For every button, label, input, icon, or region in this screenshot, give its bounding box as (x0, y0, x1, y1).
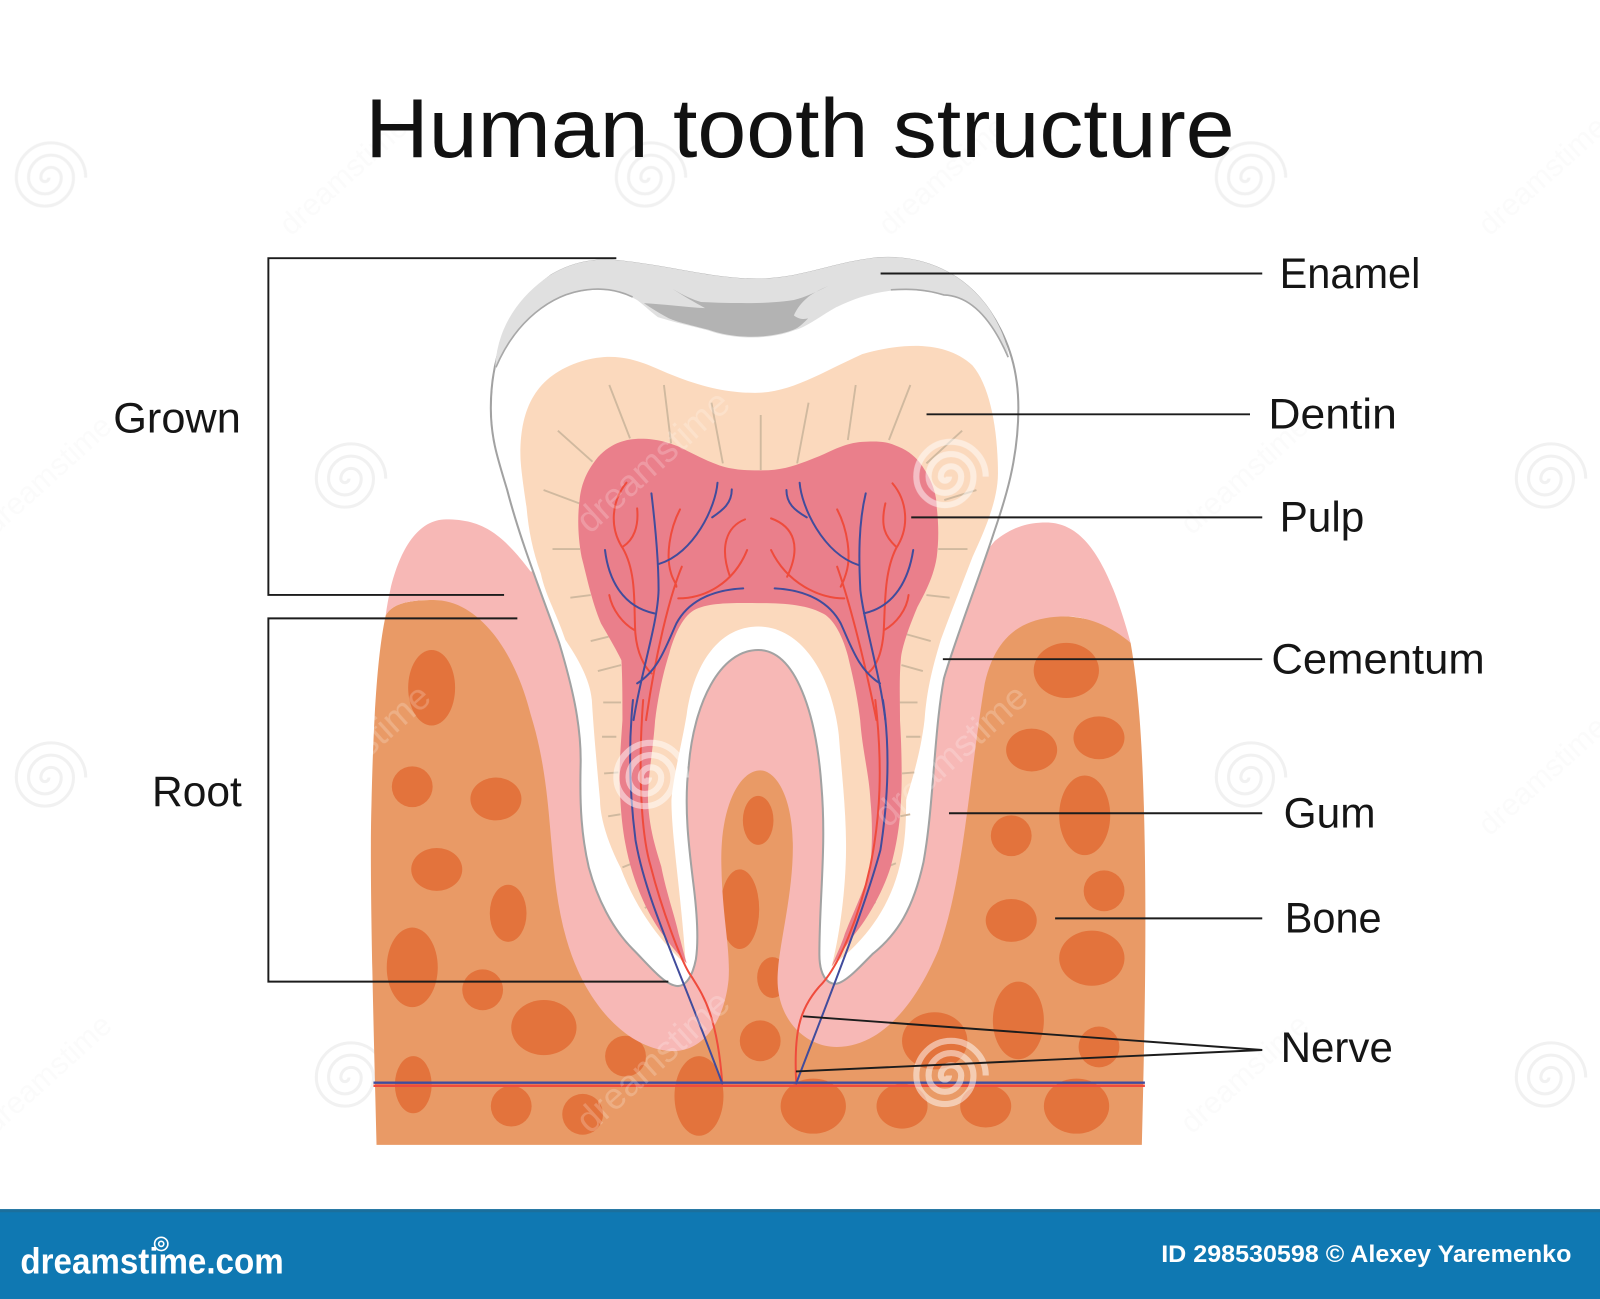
label: Root: Root (152, 768, 242, 816)
nerve: root vessels (630, 700, 888, 1083)
leader: nerve (796, 1016, 1262, 1071)
watermark overlay: dreamstime (866, 676, 1036, 835)
footer logo spiral (155, 1237, 168, 1251)
watermark overlay: dreamstime (269, 676, 439, 835)
bracket: crown (268, 258, 616, 595)
pulp (578, 439, 938, 966)
leader: dentin (927, 413, 1250, 415)
footer credit: ID 298530598 © Alexey Yaremenko (1161, 1241, 1571, 1268)
bracket: root (268, 618, 668, 982)
faint background watermarks: dreamstime (273, 110, 414, 242)
faint background watermarks: dreamstime (1174, 1008, 1315, 1140)
leader: enamel (881, 272, 1262, 274)
nerve: base line (373, 1083, 1145, 1086)
footer logo: dreamstime.com (20, 1241, 284, 1281)
label: Pulp: Pulp (1280, 494, 1364, 542)
label: Cementum: Cementum (1271, 635, 1485, 683)
footer band (0, 1209, 1600, 1299)
enamel (496, 258, 1008, 367)
bone spots (387, 643, 1124, 1136)
bone (371, 600, 1145, 1145)
label: Dentin: Dentin (1268, 391, 1397, 439)
dentin (520, 346, 998, 966)
leader: bone (1055, 917, 1262, 919)
label: Gum: Gum (1284, 790, 1376, 838)
watermark overlay (269, 382, 1036, 1141)
watermark overlay: dreamstime (568, 382, 738, 541)
faint background watermarks: dreamstime (872, 110, 1013, 242)
dentin tubules (544, 385, 976, 702)
leader: cementum (943, 658, 1262, 660)
label: Enamel: Enamel (1280, 250, 1420, 298)
watermark overlay: dreamstime (568, 982, 738, 1141)
leader: gum (949, 812, 1262, 814)
label: Grown: Grown (113, 395, 241, 443)
leader: pulp (911, 516, 1262, 518)
faint background watermarks (0, 110, 1600, 1140)
tooth body (491, 258, 1018, 986)
blood vessels and nerves in pulp (605, 483, 913, 720)
label: Nerve: Nerve (1281, 1024, 1393, 1072)
title: Human tooth structure (365, 81, 1235, 175)
gum (386, 519, 1131, 1051)
faint background watermarks: dreamstime (1174, 409, 1315, 541)
label: Bone: Bone (1285, 895, 1382, 943)
